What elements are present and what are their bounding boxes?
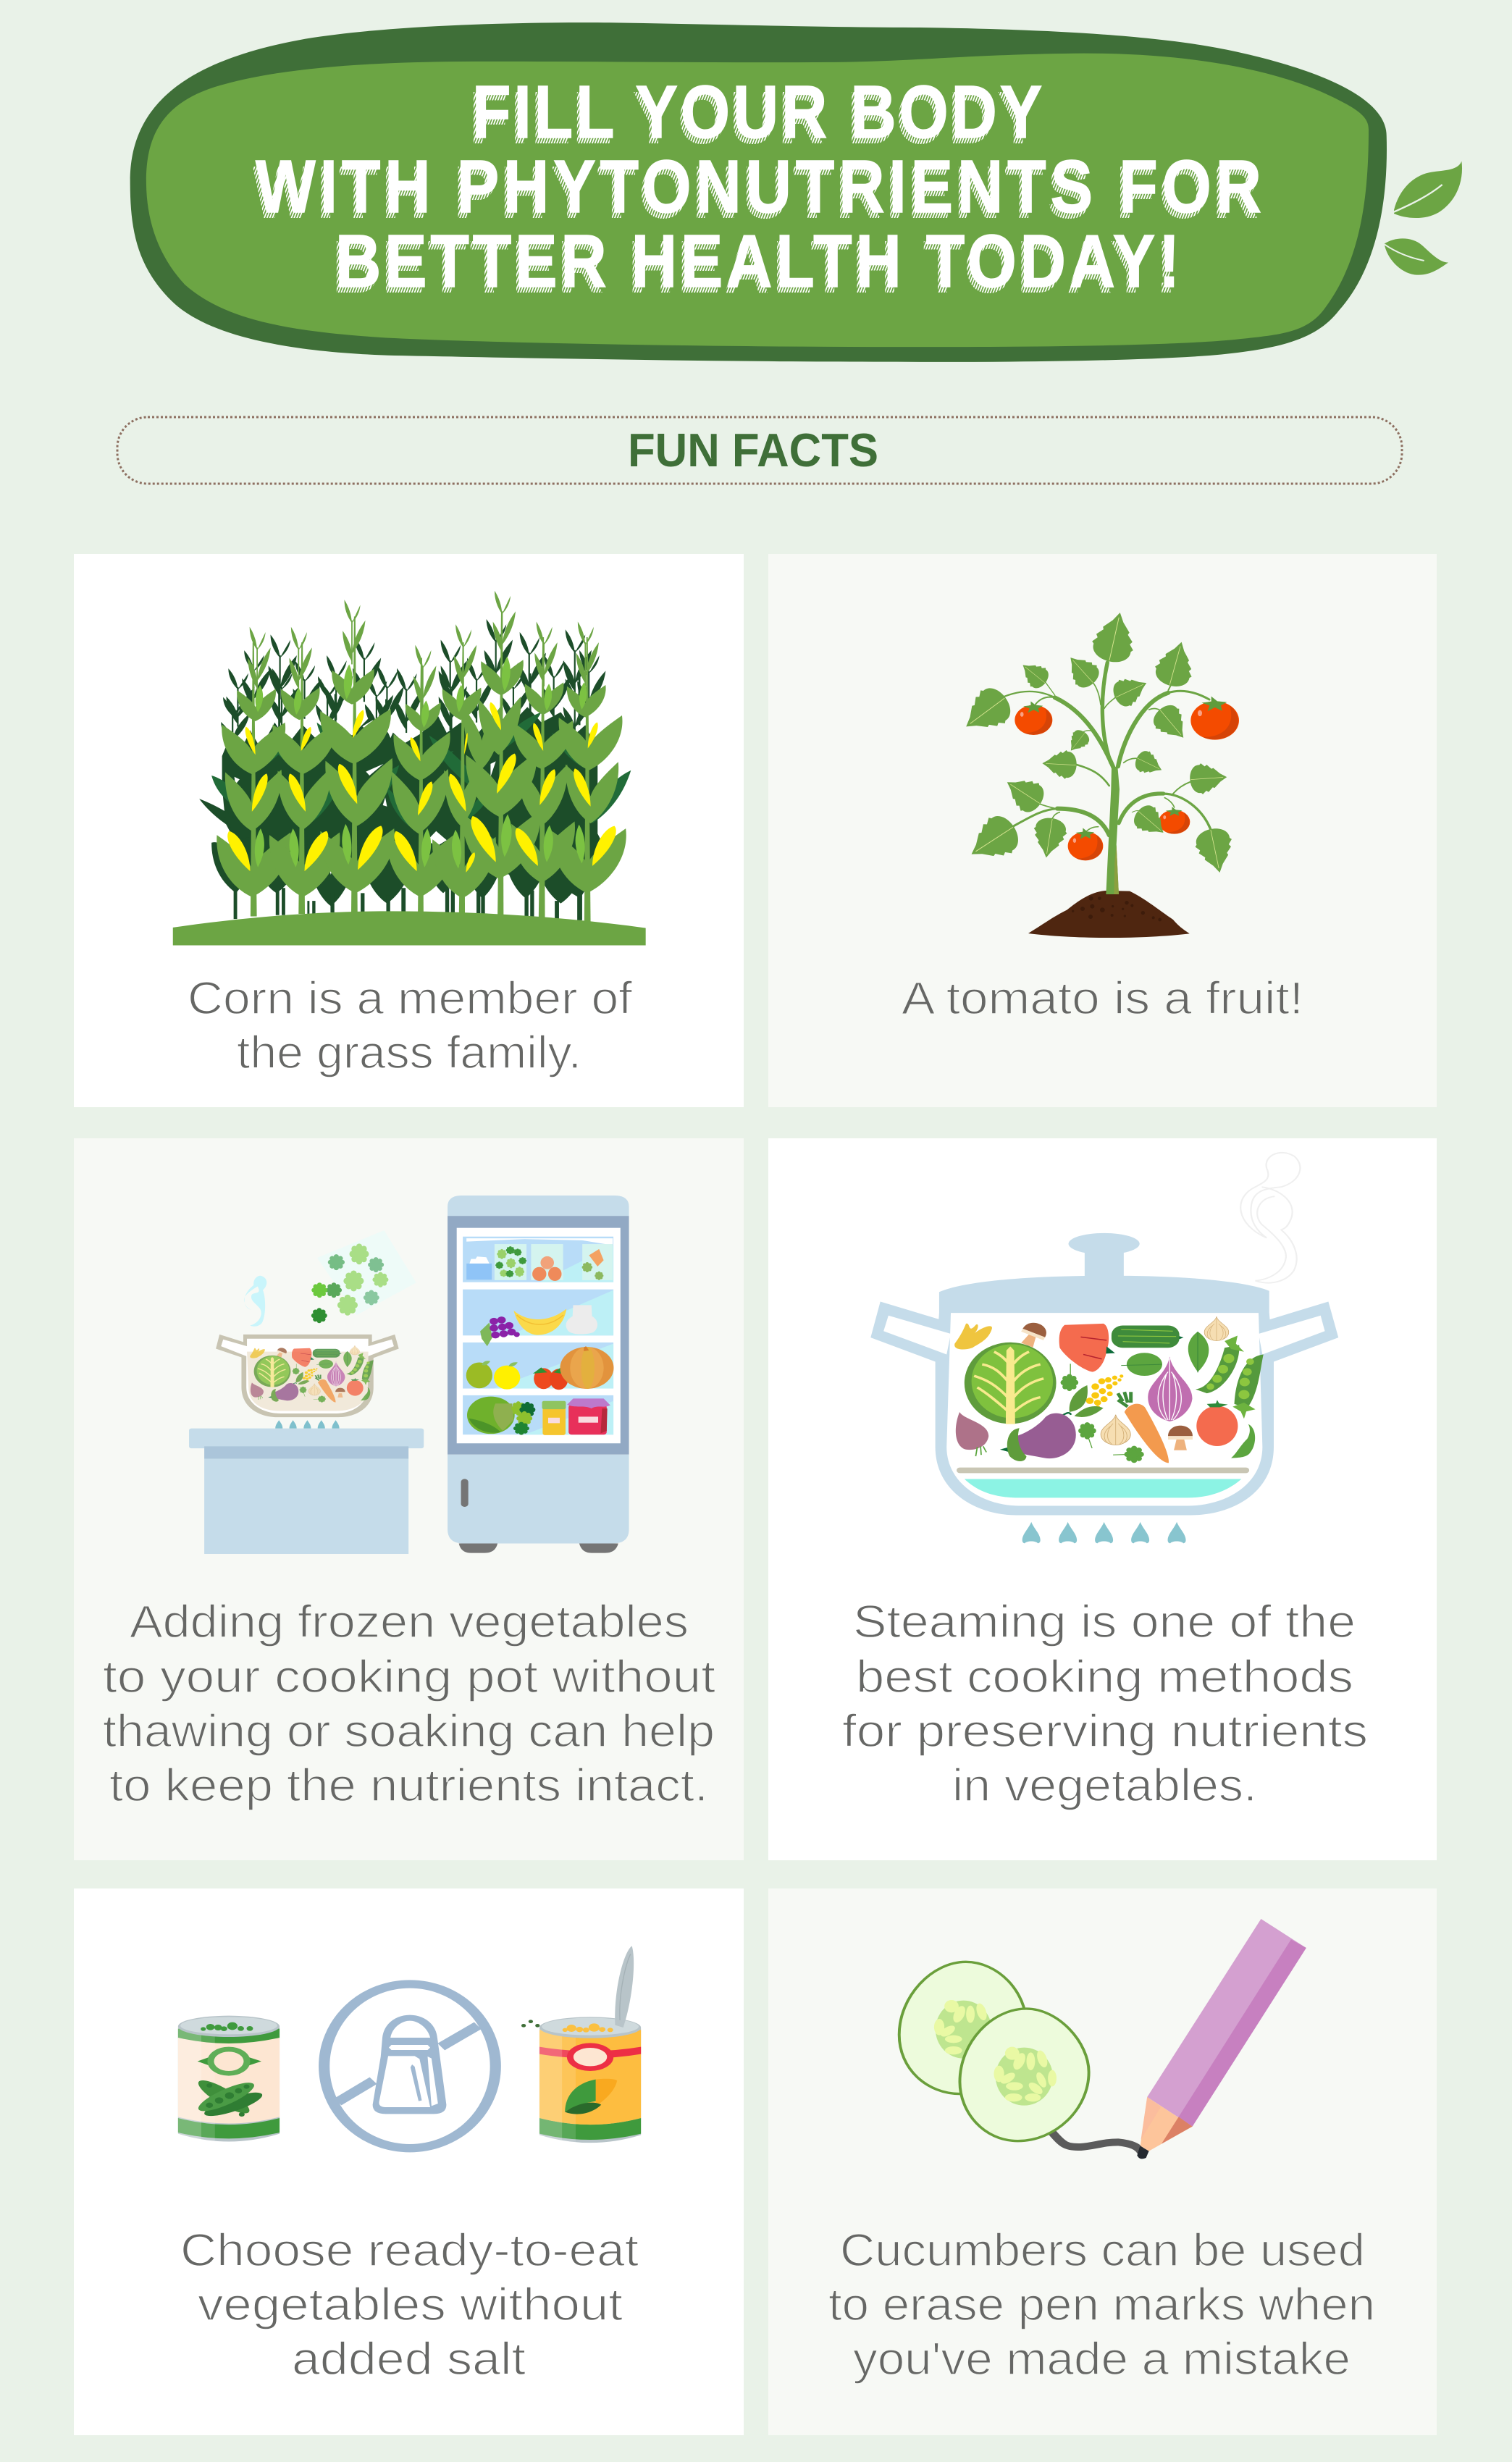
tomatoes xyxy=(1015,697,1239,860)
steamer shelf and water xyxy=(957,1468,1249,1497)
illustration: cans and no-salt sign xyxy=(178,1946,641,2148)
title text: WITH PHYTONUTRIENTS FOR xyxy=(256,145,1261,229)
steam xyxy=(244,1276,266,1327)
text: no salt fact: vegetables without xyxy=(198,2280,623,2330)
fridge second shelf xyxy=(480,1305,597,1346)
illustration: stove, pot and fridge xyxy=(189,1196,629,1554)
text: cucumber fact: you've made a mistake xyxy=(853,2334,1351,2385)
text: corn fact xyxy=(188,973,633,1078)
panel: tomato xyxy=(768,554,1437,1107)
illustration: cucumber slices and pencil xyxy=(899,1919,1306,2159)
frozen vegetable bag xyxy=(311,1230,416,1323)
stems xyxy=(1004,663,1211,894)
text: tomato fact: A tomato is a fruit! xyxy=(902,973,1303,1024)
text: steaming fact xyxy=(842,1597,1368,1811)
text: corn fact: Corn is a member of xyxy=(188,973,633,1024)
vegetables xyxy=(954,1316,1264,1463)
panel: frozen vegetables xyxy=(74,1138,744,1860)
banner blob shape xyxy=(130,22,1387,362)
stove counter xyxy=(189,1420,424,1554)
vegetables inside small pot xyxy=(250,1345,374,1403)
illustration: corn field xyxy=(173,591,646,946)
yellow corn can xyxy=(521,1946,641,2143)
fun facts heading: FUN FACTS xyxy=(628,424,878,476)
title text: FILL YOUR BODY xyxy=(469,76,1039,160)
title text: FILL YOUR BODY xyxy=(472,70,1042,154)
text: steaming fact: for preserving nutrients xyxy=(842,1706,1368,1757)
fun facts heading xyxy=(117,417,1402,484)
panel: cucumbers xyxy=(768,1888,1437,2435)
title text: WITH PHYTONUTRIENTS FOR xyxy=(253,151,1259,235)
text: cucumber fact: to erase pen marks when xyxy=(828,2280,1375,2330)
illustration: steaming pot xyxy=(870,1153,1338,1543)
fridge bottom shelf xyxy=(467,1397,610,1435)
second cucumber slice xyxy=(959,2009,1089,2141)
text: frozen vegetables fact: to your cooking pot without xyxy=(103,1652,716,1702)
illustration: tomato plant xyxy=(954,608,1239,938)
fridge xyxy=(448,1196,629,1553)
flames xyxy=(1022,1522,1186,1543)
no salt sign xyxy=(324,1984,495,2148)
text: cucumber fact xyxy=(828,2225,1375,2385)
first cucumber slice xyxy=(899,1962,1027,2094)
text: frozen vegetables fact: Adding frozen vegetables xyxy=(130,1597,689,1647)
panel: no added salt xyxy=(74,1888,744,2435)
text: frozen vegetables fact: to keep the nutrients intact. xyxy=(109,1760,708,1811)
title text: BETTER HEALTH TODAY! xyxy=(332,225,1177,309)
steam xyxy=(1240,1153,1300,1283)
text: steaming fact: best cooking methods xyxy=(856,1652,1353,1702)
leaves xyxy=(954,608,1238,876)
text: no salt fact: Choose ready-to-eat xyxy=(180,2225,639,2276)
icon: leaves xyxy=(1385,161,1462,275)
panel: corn xyxy=(74,554,744,1107)
text: no salt fact xyxy=(180,2225,639,2385)
text: frozen vegetables fact xyxy=(103,1597,716,1811)
text: steaming fact: in vegetables. xyxy=(952,1760,1257,1811)
pot body and lid xyxy=(870,1233,1338,1515)
fridge top shelf xyxy=(466,1244,613,1281)
text: no salt fact: added salt xyxy=(292,2334,526,2385)
text: steaming fact: Steaming is one of the xyxy=(853,1597,1356,1647)
pot xyxy=(216,1335,399,1417)
soil mound xyxy=(1028,891,1190,938)
pencil xyxy=(1137,1919,1306,2159)
title banner xyxy=(130,22,1387,362)
title text: BETTER HEALTH TODAY! xyxy=(335,219,1180,303)
text: cucumber fact: Cucumbers can be used xyxy=(840,2225,1365,2276)
text: frozen vegetables fact: thawing or soaking can help xyxy=(103,1706,715,1757)
pen mark line xyxy=(1052,2133,1142,2154)
title text xyxy=(253,70,1261,309)
text: corn fact: the grass family. xyxy=(237,1028,581,1078)
green pea can xyxy=(178,2016,280,2141)
panel: steaming xyxy=(768,1138,1437,1860)
fridge third shelf xyxy=(466,1346,614,1390)
